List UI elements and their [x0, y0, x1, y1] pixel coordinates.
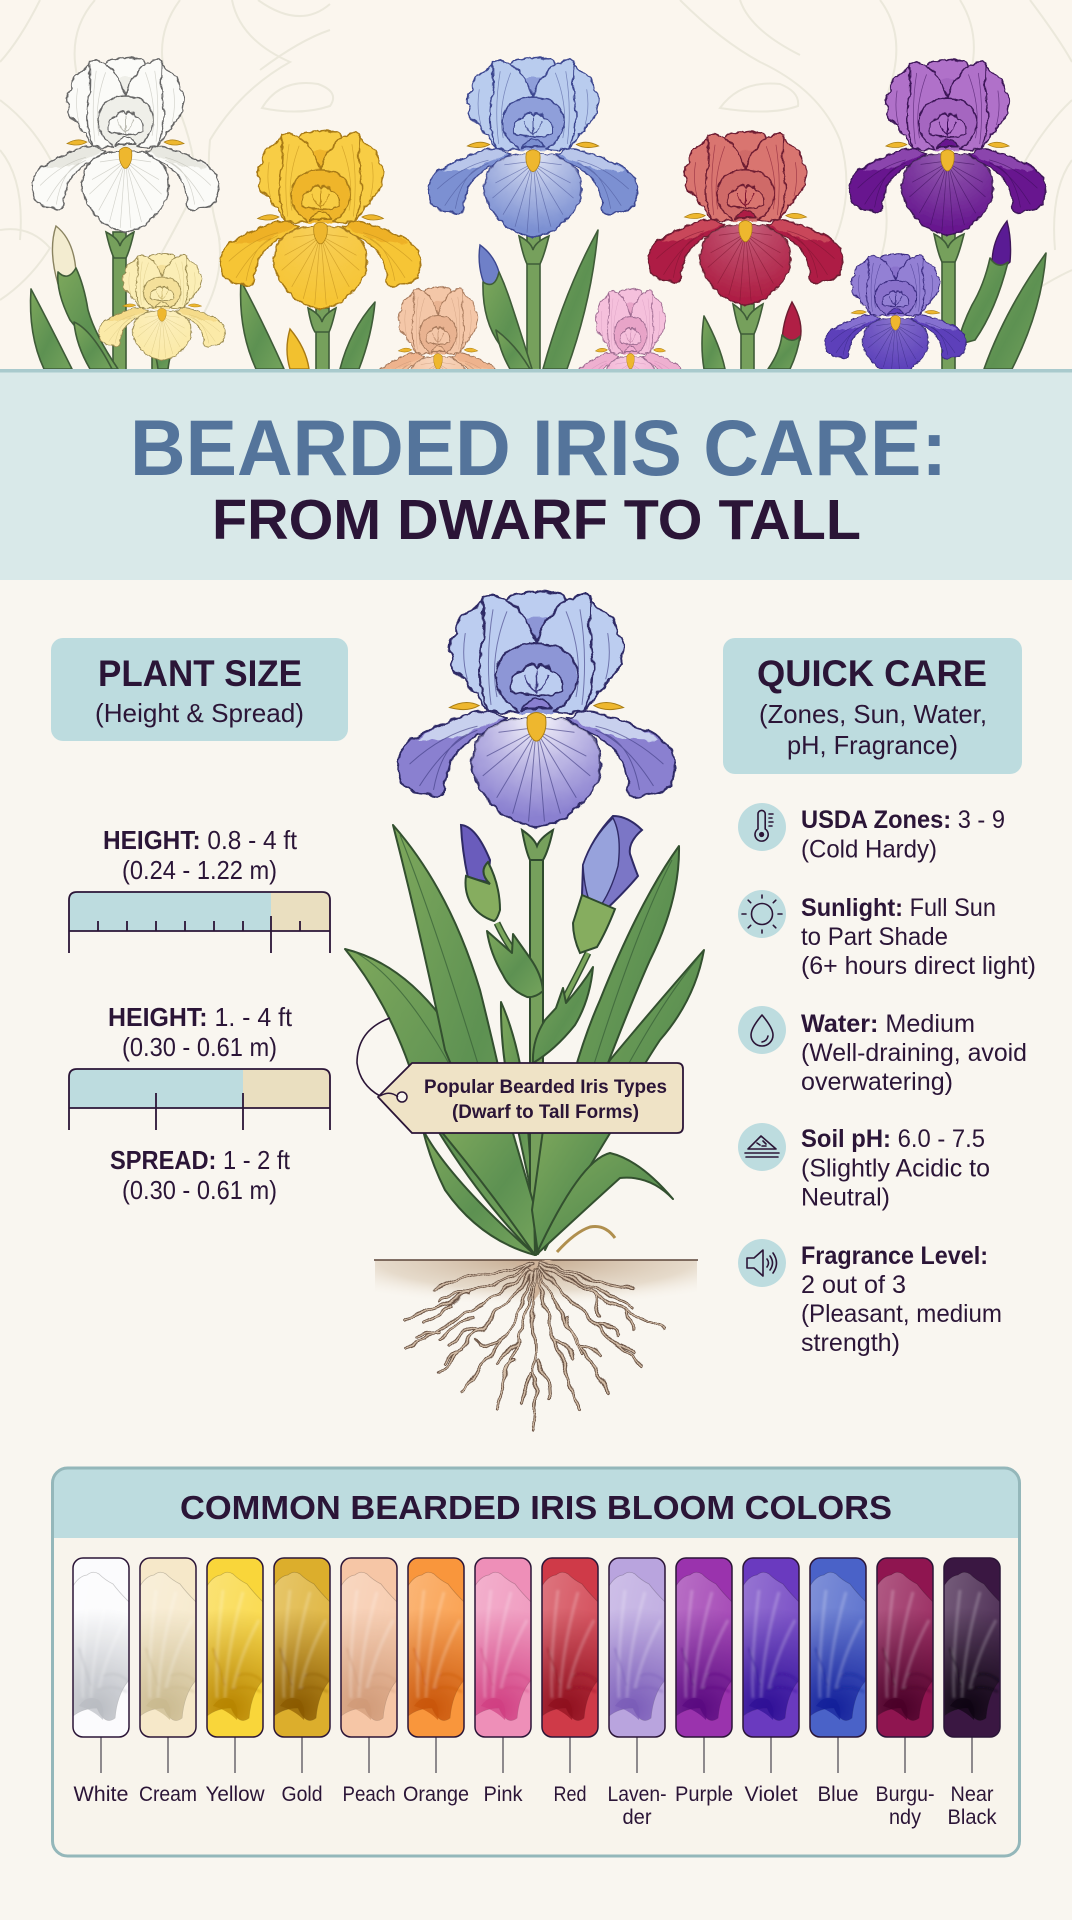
title line one: BEARDED IRIS CARE:: [130, 403, 947, 492]
leaves and stem: blue iris plant: [479, 230, 598, 372]
height label two: [108, 1002, 293, 1062]
item: fragrance: Fragrance Level:: [801, 1242, 988, 1270]
swatch: burgundy: ndy: [889, 1806, 921, 1829]
swatch: cream: [139, 1558, 197, 1806]
swatch: red: Red: [554, 1783, 586, 1806]
swatch: lavender: Laven-: [608, 1783, 666, 1806]
swatch: peach: [341, 1558, 397, 1806]
item: sunlight: [738, 890, 1036, 980]
iris: pink: [575, 289, 686, 415]
leaves and stem: purple iris plant: [934, 221, 1046, 372]
item: soil pH: Neutral): [801, 1184, 890, 1212]
height label one: [103, 825, 298, 885]
iris: small violet stem and bloom: [825, 254, 966, 374]
swatch: pink: Pink: [484, 1783, 523, 1806]
central iris bloom: [398, 591, 675, 828]
swatch: blue: [810, 1558, 866, 1806]
quick care heading: pH, Fragrance): [787, 730, 958, 760]
swatch: near black: Near: [950, 1783, 994, 1806]
iris: white: [33, 57, 218, 233]
decorative faint botanical background: [0, 0, 1072, 372]
swatch: near black: Black: [948, 1806, 997, 1829]
spread bar: [69, 1069, 330, 1130]
item: sunlight: to Part Shade: [801, 923, 948, 951]
swatch: white: White: [74, 1783, 128, 1806]
item: water: (Well-draining, avoid: [801, 1039, 1027, 1067]
plant size heading: [51, 638, 348, 741]
plant size heading: (Height & Spread): [95, 698, 304, 728]
item: water: [738, 1006, 1027, 1096]
roots: [407, 1262, 665, 1430]
spread label: SPREAD: 1 - 2 ft: [110, 1145, 291, 1175]
flower row: leaves, stems and buds: [31, 221, 1046, 372]
tag: popular iris types: (Dwarf to Tall Forms): [452, 1101, 639, 1123]
leaves and stem: white iris plant: [31, 226, 134, 372]
swatch: near black: [944, 1558, 1000, 1829]
swatch: burgundy: [876, 1558, 935, 1829]
swatch: orange: Orange: [403, 1783, 469, 1806]
swatch: red: [542, 1558, 598, 1806]
plant size heading: PLANT SIZE: [98, 653, 302, 694]
height label two: HEIGHT: 1. - 4 ft: [108, 1002, 293, 1032]
iris: blue: [429, 57, 637, 238]
main stem: [522, 830, 553, 1210]
title banner: [0, 369, 1072, 580]
spread label: (0.30 - 0.61 m): [122, 1175, 277, 1205]
item: USDA zones: USDA Zones: 3 - 9: [801, 806, 1005, 834]
front base leaves: [423, 1130, 673, 1255]
swatch: white: [73, 1558, 129, 1806]
left bud: [461, 825, 543, 997]
back leaves: [345, 825, 704, 1255]
tag: popular iris types: Popular Bearded Iris Types: [424, 1076, 667, 1098]
ground line: [374, 1259, 698, 1261]
item: water: Water: Medium: [801, 1010, 975, 1038]
item: fragrance: [738, 1239, 1002, 1357]
spread label: [110, 1145, 291, 1205]
right bud: [533, 816, 642, 1063]
panel: bloom colors: [52, 1468, 1020, 1856]
iris: yellow: [221, 130, 420, 310]
panel: quick care: [723, 638, 1036, 1357]
iris: purple: [850, 59, 1045, 236]
item: USDA zones: (Cold Hardy): [801, 836, 937, 864]
item: fragrance: strength): [801, 1329, 900, 1357]
swatch: gold: [274, 1558, 330, 1806]
flower row: small irises: [99, 253, 966, 417]
iris: peach: [375, 287, 501, 417]
quick care heading: (Zones, Sun, Water,: [759, 699, 987, 729]
central iris plant: [345, 591, 704, 1430]
swatch: gold: Gold: [282, 1783, 322, 1806]
item: sunlight: Sunlight: Full Sun: [801, 894, 996, 922]
height bar one: [69, 892, 330, 953]
icon: sun: [738, 890, 786, 938]
swatch: lavender: der: [622, 1806, 652, 1829]
quick care heading: QUICK CARE: [757, 653, 987, 694]
title line two: FROM DWARF TO TALL: [212, 488, 861, 552]
tag: popular iris types: [357, 1018, 683, 1133]
item: fragrance: (Pleasant, medium: [801, 1300, 1002, 1328]
swatch: purple: [675, 1558, 733, 1806]
item: USDA zones: [738, 803, 1005, 864]
bloom colors heading: COMMON BEARDED IRIS BLOOM COLORS: [180, 1489, 892, 1526]
swatch: yellow: [206, 1558, 265, 1806]
quick care heading: [723, 638, 1022, 774]
leaves and stem: red iris plant: [702, 302, 801, 372]
swatch: purple: Purple: [675, 1783, 733, 1806]
iris: cream stem and bloom: [99, 253, 225, 372]
height label two: (0.30 - 0.61 m): [122, 1032, 277, 1062]
swatch: cream: Cream: [139, 1783, 197, 1806]
swatch: burgundy: Burgu-: [876, 1783, 935, 1806]
item: fragrance: 2 out of 3: [801, 1271, 906, 1299]
item: soil pH: Soil pH: 6.0 - 7.5: [801, 1125, 985, 1153]
item: water: overwatering): [801, 1068, 953, 1096]
swatch: orange: [403, 1558, 469, 1806]
icon: fragrance speaker: [738, 1239, 786, 1287]
soil shadow: [375, 1260, 697, 1322]
swatch: violet: [743, 1558, 799, 1806]
swatch: peach: Peach: [342, 1783, 396, 1806]
height label one: (0.24 - 1.22 m): [122, 855, 277, 885]
item: soil pH: (Slightly Acidic to: [801, 1154, 990, 1182]
leaves and stem: yellow iris plant: [241, 281, 375, 372]
icon: soil mound: [738, 1123, 786, 1171]
swatch leader lines: [101, 1737, 972, 1773]
panel: plant size: [51, 638, 348, 1205]
item: soil pH: [738, 1123, 990, 1212]
swatch: lavender: [608, 1558, 666, 1829]
icon: water drop: [738, 1006, 786, 1054]
height label one: HEIGHT: 0.8 - 4 ft: [103, 825, 298, 855]
item: sunlight: (6+ hours direct light): [801, 952, 1036, 980]
swatch: pink: [475, 1558, 531, 1806]
swatch: blue: Blue: [818, 1783, 858, 1806]
flower row: tall irises: [33, 57, 1045, 310]
icon: thermometer: [738, 803, 786, 851]
iris: red: [649, 131, 842, 306]
swatch: yellow: Yellow: [206, 1783, 265, 1806]
swatch: violet: Violet: [744, 1783, 798, 1806]
